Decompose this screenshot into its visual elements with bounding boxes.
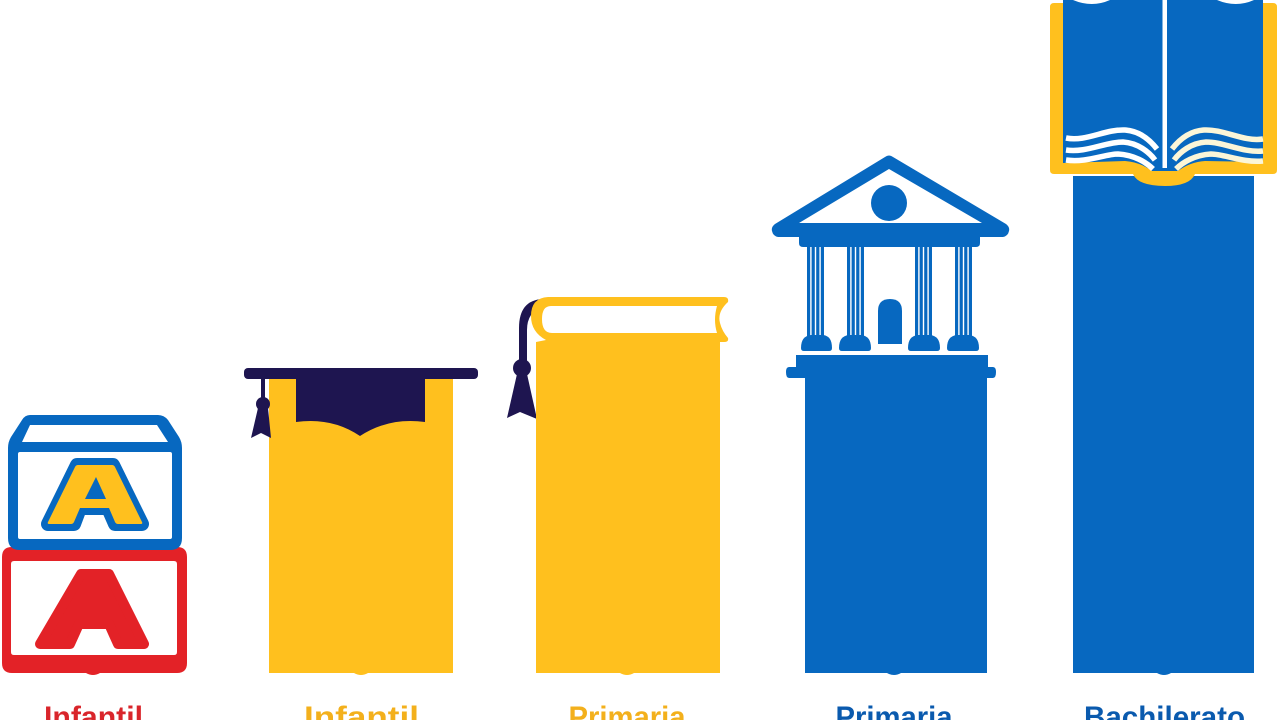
bar <box>1073 176 1254 675</box>
stage 2: Infantil bar with graduation cap <box>244 368 478 720</box>
icon: right page waves <box>1172 130 1263 169</box>
icon: red letter block <box>2 547 187 675</box>
bar and plinth <box>786 355 996 675</box>
icon: temple roof <box>772 156 1009 247</box>
icon: top page highlights <box>1073 0 1254 4</box>
icon: left page waves <box>1066 130 1157 169</box>
stage 5: Bachillerato bar with open book <box>1050 0 1277 720</box>
icon: open book cover <box>1050 3 1277 186</box>
icon: door <box>878 299 902 344</box>
icon: blue letter block <box>8 415 182 550</box>
icon: graduation cap <box>244 368 478 438</box>
icon: column bases <box>801 335 979 351</box>
icon: closed book <box>531 297 728 342</box>
icon: book centre fold <box>1162 0 1167 168</box>
icon: fluted columns <box>809 247 970 336</box>
icon: navy ribbon and tassel <box>507 299 543 419</box>
bar <box>536 342 720 675</box>
stage 4: Primaria bar with classical building <box>772 156 1009 720</box>
bar <box>269 378 453 675</box>
stage 3: Primaria bar with closed book <box>507 297 728 720</box>
icon: open book pages <box>1063 0 1263 171</box>
stage 1: Infantil alphabet blocks <box>2 415 187 720</box>
icon: pediment circle <box>871 185 907 221</box>
